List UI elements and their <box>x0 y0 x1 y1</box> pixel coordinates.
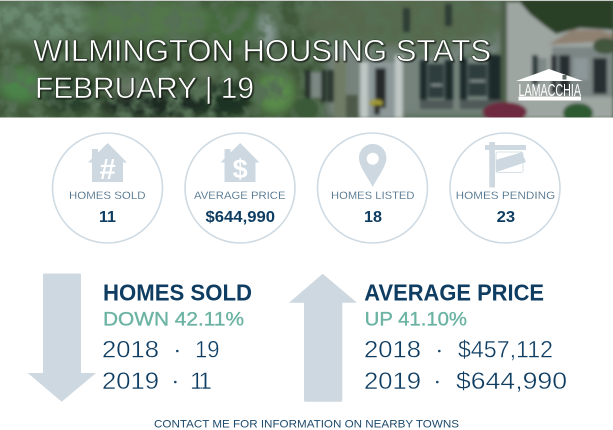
panel: homes sold comparison: 2018 <box>102 336 159 364</box>
stat circle: homes listed: HOMES LISTED <box>331 190 415 202</box>
stat circle: homes pending: HOMES PENDING <box>456 190 555 202</box>
panel: homes sold comparison: 2019 <box>102 368 159 395</box>
panel: homes sold comparison: HOMES SOLD <box>103 280 252 306</box>
icon: house with hash: # <box>100 154 116 186</box>
panel: average price comparison: UP 41.10% <box>365 308 467 330</box>
icon: for sale sign <box>485 142 526 188</box>
panel: average price comparison: 2018 <box>364 336 421 364</box>
icon: house with dollar: $ <box>233 154 248 184</box>
stat circle: average price: AVERAGE PRICE <box>194 190 286 202</box>
arrow: up <box>289 274 357 402</box>
stat circle: homes listed: 18 <box>364 209 382 226</box>
stat circle: homes sold <box>52 133 162 243</box>
arrow: down <box>28 274 96 402</box>
foliage texture <box>0 0 325 118</box>
stat circle: homes sold: HOMES SOLD <box>69 190 146 202</box>
header photo: blurred house and trees <box>0 0 613 123</box>
panel: homes sold comparison: 11 <box>190 368 211 395</box>
panel: average price comparison: $457,112 <box>458 336 553 364</box>
icon: map pin <box>359 144 386 187</box>
panel: homes sold comparison: 19 <box>195 336 220 364</box>
stat circle: homes pending <box>450 133 560 243</box>
stat circle: homes listed <box>318 133 428 243</box>
title: WILMINGTON HOUSING STATS <box>33 34 491 68</box>
stat circle: homes sold: 11 <box>99 209 116 226</box>
panel: homes sold comparison <box>102 280 252 395</box>
panel: average price comparison <box>364 280 567 395</box>
stat circle: average price <box>185 133 295 243</box>
panel: homes sold comparison: DOWN 42.11% <box>103 308 244 330</box>
panel: average price comparison: 2019 <box>364 368 421 395</box>
title: FEBRUARY | 19 <box>35 72 254 105</box>
panel: average price comparison: $644,990 <box>456 368 567 395</box>
stat circle: average price: $644,990 <box>206 209 275 226</box>
stat circle: homes pending: 23 <box>497 209 516 226</box>
title <box>33 34 491 105</box>
logo: Lamacchia <box>516 69 583 100</box>
panel: average price comparison: AVERAGE PRICE <box>364 280 544 306</box>
